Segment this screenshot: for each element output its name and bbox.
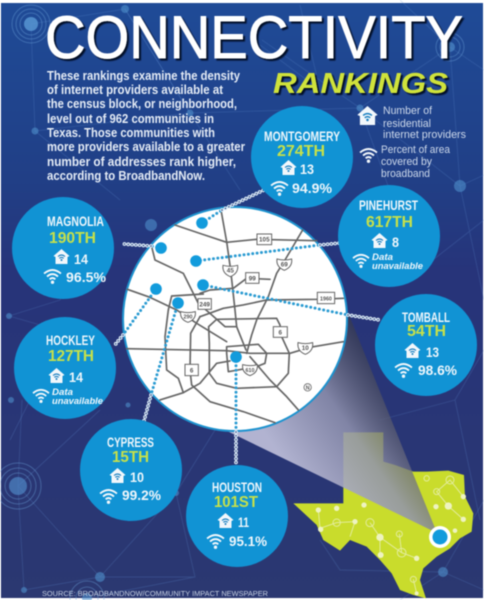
- intro text block: according to BroadbandNow.: [47, 169, 205, 183]
- panel: Montgomery: MONTGOMERY: [264, 129, 340, 144]
- panel: Houston: [186, 465, 288, 567]
- legend text: percent covered: Percent of area: [381, 144, 451, 156]
- roads and highway labels: 45: [227, 268, 234, 275]
- panel: Tomball: [375, 294, 477, 396]
- legend text: number of providers: residential: [383, 118, 431, 130]
- panel: Hockley: HOCKLEY: [46, 333, 95, 348]
- legend text: number of providers: [383, 105, 466, 141]
- panel: Hockley: [14, 317, 116, 419]
- roads and highway labels: 99: [249, 275, 256, 282]
- icon: legend house: [357, 106, 378, 125]
- panel: Hockley: 14: [69, 369, 83, 385]
- source line: SOURCE: BROADBANDNOW/COMMUNITY IMPACT NEWSPAPER: [42, 589, 269, 598]
- legend text: number of providers: internet providers: [383, 129, 466, 141]
- panel: Hockley: 127TH: [48, 348, 94, 365]
- north marker: [304, 384, 311, 392]
- panel: Pinehurst: 8: [392, 234, 399, 250]
- roads and highway labels: 105: [259, 237, 270, 244]
- roads and highway labels: 290: [184, 315, 192, 321]
- legend text: number of providers: Number of: [383, 105, 433, 117]
- icon: legend wifi: [360, 149, 377, 163]
- roads and highway labels: 10: [302, 345, 309, 352]
- panel: Magnolia: 96.5%: [66, 269, 107, 285]
- legend text: percent covered: covered by: [381, 156, 432, 168]
- panel: Hockley: unavailable: [52, 396, 104, 407]
- icon: Houston location on Texas map: [429, 526, 451, 548]
- panel: Tomball: 13: [426, 344, 439, 360]
- panel: Montgomery: 274TH: [277, 143, 325, 160]
- roads and highway labels: 69: [281, 261, 288, 268]
- intro text block: the census block, or neighborhood,: [47, 97, 237, 111]
- panel: Cypress: 99.2%: [122, 487, 162, 503]
- panel: Pinehurst: PINEHURST: [359, 198, 419, 213]
- panel: Tomball: 54TH: [407, 323, 446, 340]
- panel: Magnolia: [12, 197, 114, 299]
- intro text block: number of addresses rank higher,: [47, 155, 236, 169]
- panel: Magnolia: 190TH: [49, 230, 96, 247]
- roads and highway labels: 610: [246, 368, 254, 374]
- panel: Pinehurst: Data: [372, 252, 393, 263]
- roads and highway labels: 1960: [320, 296, 332, 302]
- panel: Houston: 95.1%: [229, 533, 268, 549]
- map disc: [123, 207, 347, 431]
- Houston area road map: [123, 207, 347, 431]
- panel: Montgomery: 13: [300, 161, 314, 177]
- spotlight beam from map to Houston on Texas: [225, 310, 437, 533]
- north marker: N: [306, 386, 310, 392]
- panel: Hockley: Data: [52, 387, 73, 398]
- intro text block: These rankings examine the density: [47, 69, 240, 83]
- legend text: percent covered: [381, 144, 451, 180]
- panel: Tomball: TOMBALL: [402, 310, 450, 325]
- panel: Houston: 11: [238, 514, 249, 530]
- roads and highway labels: 6: [279, 329, 283, 336]
- panel: Pinehurst: [338, 185, 440, 287]
- panel: Houston: HOUSTON: [212, 480, 262, 495]
- subtitle: RANKINGS: RANKINGS: [273, 68, 449, 100]
- panel: Montgomery: [251, 106, 353, 208]
- legend text: percent covered: broadband: [381, 168, 430, 180]
- roads and highway labels: 6: [190, 367, 194, 374]
- panel: Pinehurst: unavailable: [372, 261, 424, 272]
- roads and highway labels: [127, 210, 343, 423]
- intro text block: more providers available to a greater: [47, 140, 245, 154]
- roads and highway labels: 249: [199, 301, 210, 308]
- map location dots: [150, 217, 242, 363]
- panel: Magnolia: 14: [74, 251, 88, 267]
- connector lines from map dots to city circles: [114, 190, 380, 466]
- panel: Cypress: CYPRESS: [107, 435, 154, 450]
- panel: Pinehurst: 617TH: [366, 214, 413, 231]
- panel: Houston: 101ST: [214, 494, 259, 511]
- panel: Montgomery: 94.9%: [292, 180, 333, 196]
- panel: Cypress: [80, 419, 182, 521]
- intro text block: of internet providers available at: [47, 83, 224, 97]
- legend: [357, 105, 466, 180]
- intro text block: Texas. Those communities with: [47, 126, 215, 140]
- map of Texas: [293, 432, 473, 598]
- intro text block: level out of 962 communities in: [47, 112, 214, 126]
- panel: Magnolia: MAGNOLIA: [47, 214, 104, 229]
- panel: Cypress: 10: [130, 469, 144, 485]
- title: CONNECTIVITY: CONNECTIVITY: [45, 4, 463, 71]
- intro text block: [47, 69, 245, 183]
- panel: Cypress: 15TH: [112, 449, 149, 466]
- panel: Tomball: 98.6%: [418, 362, 458, 378]
